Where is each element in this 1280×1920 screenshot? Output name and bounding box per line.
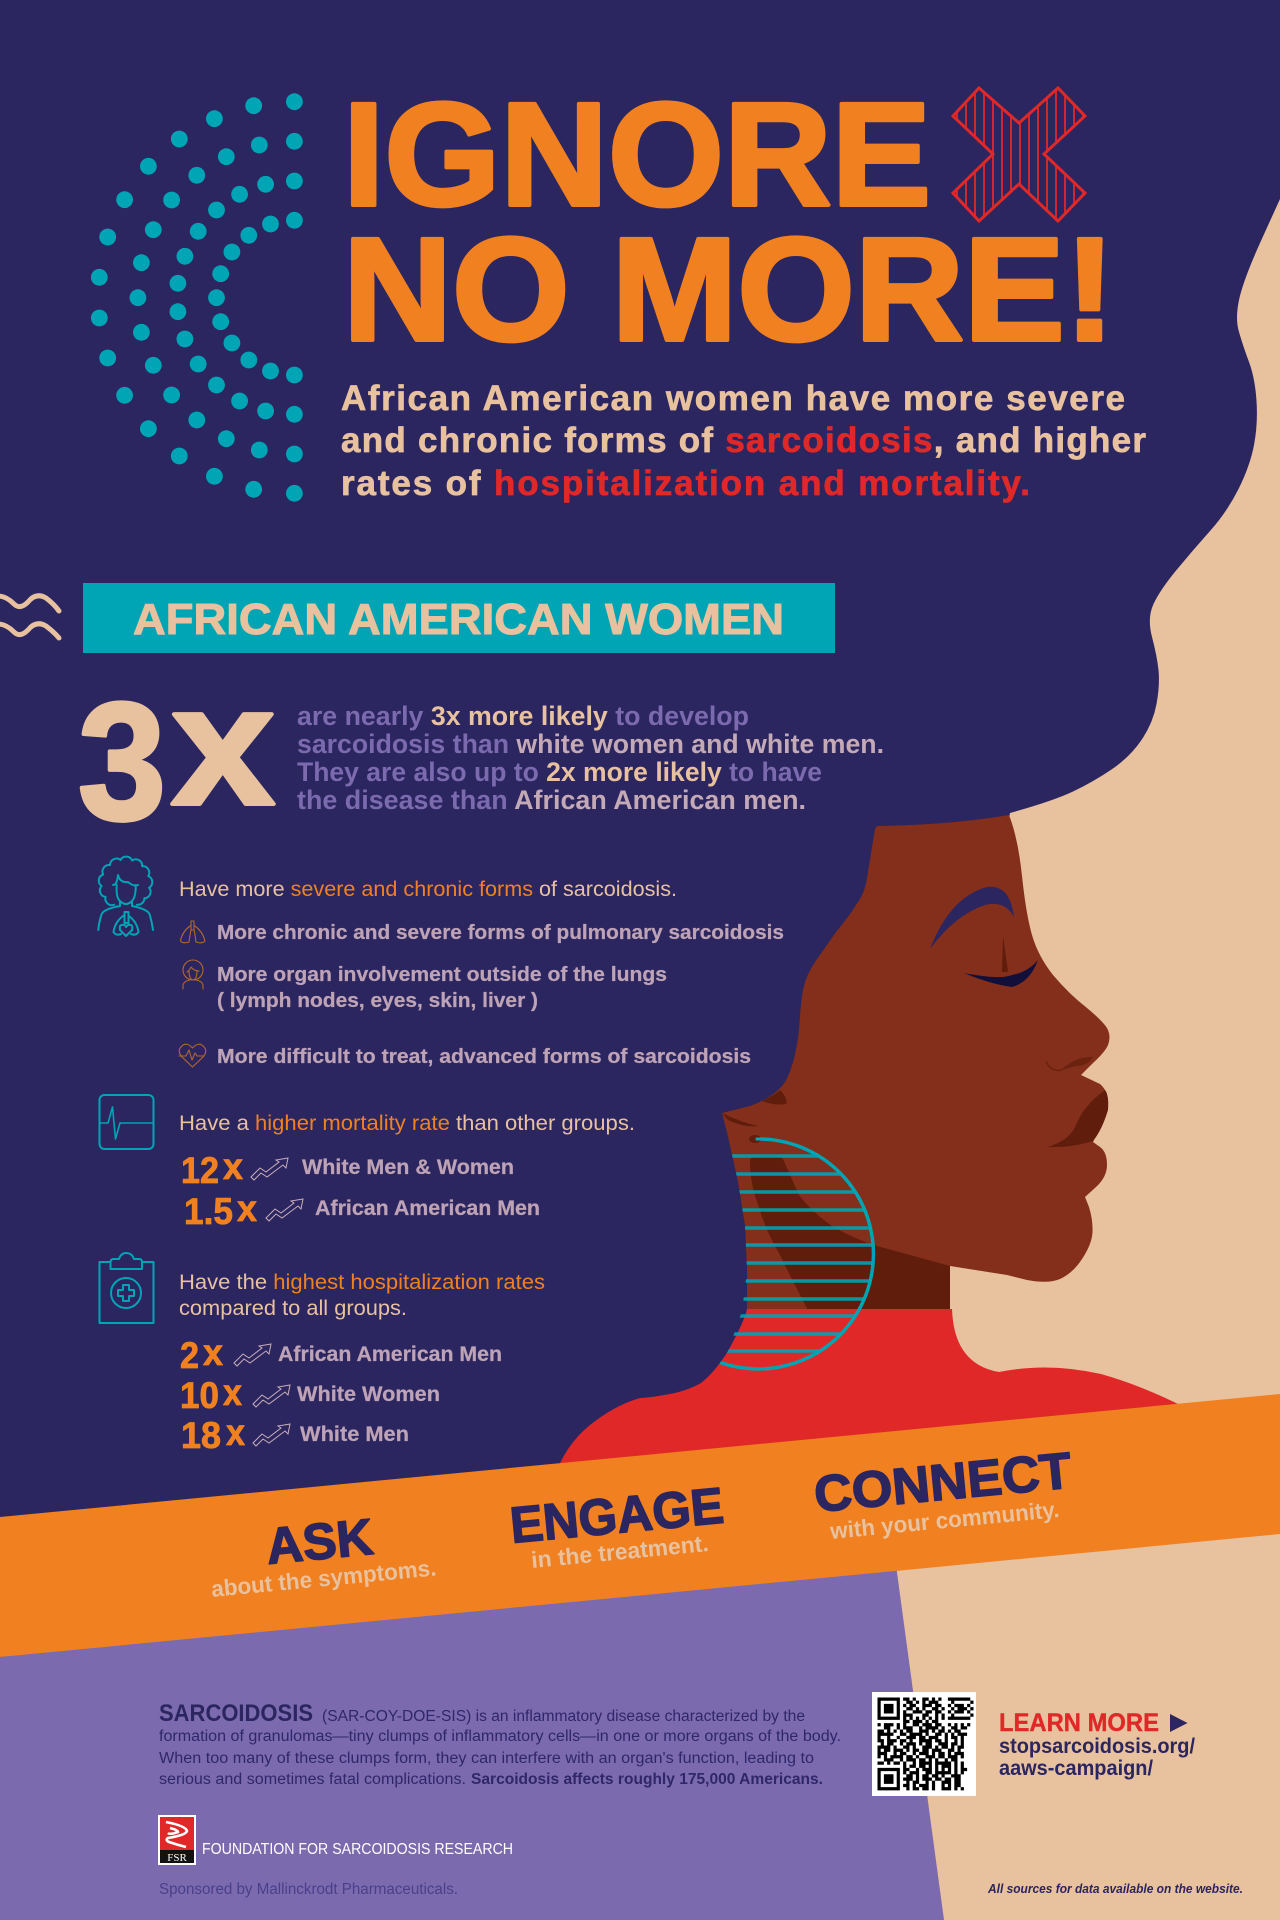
purple footer panel bbox=[0, 1540, 1000, 1920]
stat: 18x white men: x bbox=[226, 1412, 245, 1453]
item: difficult to treat: More difficult to treat, advanced forms of sarcoidosis bbox=[217, 1046, 751, 1068]
subtitle bbox=[341, 379, 1146, 503]
hospitalization heading: Have the highest hospitalization rates bbox=[179, 1271, 545, 1294]
QR code bbox=[872, 1692, 976, 1796]
neck shadow bbox=[750, 1154, 950, 1312]
3x paragraph: the disease than African American men. bbox=[297, 785, 806, 815]
band call to action: ask bbox=[210, 1508, 437, 1602]
stat: 12x white men and women: x bbox=[223, 1146, 243, 1187]
stat: 1.5x african american men: African American Men bbox=[315, 1197, 540, 1220]
stat: 18x white men: White Men bbox=[300, 1423, 409, 1446]
stat: 10x white women: x bbox=[223, 1372, 242, 1413]
3x paragraph: They are also up to 2x more likely to have bbox=[297, 757, 822, 787]
earring bbox=[719, 1135, 876, 1371]
red shirt bbox=[553, 1309, 1180, 1480]
icon: lungs bbox=[180, 921, 205, 943]
subtitle: and chronic forms of sarcoidosis, and higher bbox=[341, 421, 1146, 460]
beige footer panel bbox=[896, 1520, 1280, 1920]
big 3x stat bbox=[78, 651, 275, 855]
stat: 18x white men bbox=[181, 1412, 409, 1456]
definition text block: SARCOIDOSIS bbox=[159, 1700, 313, 1727]
learn more: aaws-campaign/ bbox=[999, 1757, 1153, 1780]
band call to action: engage: ENGAGE bbox=[508, 1477, 726, 1554]
band call to action: engage: in the treatment. bbox=[530, 1530, 710, 1573]
definition text block: (SAR-COY-DOE-SIS) is an inflammatory disease characterized by the bbox=[322, 1708, 805, 1725]
band call to action: ask: about the symptoms. bbox=[210, 1554, 437, 1602]
jaw and ear shadows bbox=[722, 1090, 786, 1126]
learn more bbox=[999, 1709, 1195, 1780]
section banner: AFRICAN AMERICAN WOMEN bbox=[133, 595, 784, 644]
stat: 2x african american men: 2 bbox=[180, 1335, 199, 1376]
sources note: All sources for data available on the website. bbox=[987, 1882, 1243, 1896]
hair covering earring bbox=[600, 1113, 747, 1400]
stat: 10x white women bbox=[180, 1372, 440, 1416]
definition text block: serious and sometimes fatal complications. bbox=[159, 1771, 466, 1788]
big 3x stat: x bbox=[171, 651, 275, 841]
stat: 2x african american men: African American Men bbox=[278, 1343, 502, 1366]
stat: 12x white men and women: 12 bbox=[181, 1150, 219, 1191]
stat: 1.5x african american men: 1.5 bbox=[184, 1191, 233, 1232]
band call to action: ask: ASK bbox=[264, 1508, 376, 1575]
beige background behind profile bbox=[920, 199, 1280, 1480]
icon: head bbox=[183, 960, 203, 989]
stat: 12x white men and women bbox=[181, 1146, 514, 1191]
3x paragraph: sarcoidosis than white women and white men. bbox=[297, 729, 884, 759]
item: pulmonary: More chronic and severe forms of pulmonary sarcoidosis bbox=[217, 922, 784, 944]
definition text block: When too many of these clumps form, they can interfere with an organ's function, leading to bbox=[159, 1750, 814, 1767]
icon: ECG monitor bbox=[100, 1095, 154, 1149]
item: organ involvement bbox=[217, 964, 667, 1012]
stat: 10x white women: White Women bbox=[297, 1383, 440, 1406]
stat: 12x white men and women: White Men & Women bbox=[302, 1156, 514, 1179]
icon: dot semicircle bbox=[91, 93, 303, 502]
orange band bbox=[0, 1394, 1280, 1657]
band call to action: connect: with your community. bbox=[828, 1496, 1060, 1544]
eye lash bbox=[964, 960, 1038, 987]
section banner bbox=[83, 583, 835, 653]
icon: woman with lungs bbox=[98, 857, 153, 936]
title bbox=[343, 73, 1115, 372]
title: NO MORE! bbox=[343, 208, 1115, 372]
icon: heart bbox=[179, 1044, 206, 1067]
learn more: LEARN MORE bbox=[999, 1709, 1159, 1737]
eye crease bbox=[1002, 936, 1008, 972]
stat: 18x white men: 18 bbox=[181, 1415, 221, 1456]
stat: 1.5x african american men bbox=[184, 1188, 540, 1232]
hospitalization heading bbox=[179, 1271, 545, 1320]
band call to action: connect: CONNECT bbox=[812, 1441, 1074, 1523]
lips bbox=[1048, 1090, 1108, 1147]
item: organ involvement: More organ involvement outside of the lungs bbox=[217, 964, 667, 986]
definition text block: formation of granulomas—tiny clumps of inflammatory cells—in one or more organs of the body. bbox=[159, 1728, 841, 1745]
stat: 1.5x african american men: x bbox=[237, 1188, 257, 1229]
big 3x stat: 3 bbox=[78, 669, 166, 855]
title: IGNORE bbox=[343, 73, 931, 237]
face and neck bbox=[722, 815, 1110, 1312]
icon: clipboard bbox=[100, 1253, 154, 1323]
sponsor line: Sponsored by Mallinckrodt Pharmaceuticals. bbox=[159, 1881, 458, 1898]
FSR logo bbox=[158, 1815, 196, 1865]
FSR logo: FSR bbox=[167, 1852, 187, 1864]
stat: 10x white women: 10 bbox=[180, 1375, 219, 1416]
subtitle: African American women have more severe bbox=[341, 379, 1125, 418]
hospitalization heading: compared to all groups. bbox=[179, 1297, 407, 1320]
icon: waves bbox=[0, 596, 59, 638]
stat: 2x african american men bbox=[180, 1332, 502, 1376]
nostril bbox=[1046, 1061, 1062, 1070]
3x paragraph: are nearly 3x more likely to develop bbox=[297, 701, 749, 731]
definition text block bbox=[159, 1700, 841, 1788]
eyebrow bbox=[930, 887, 1014, 949]
first finding text: Have more severe and chronic forms of sarcoidosis. bbox=[179, 878, 677, 901]
definition text block: Sarcoidosis affects roughly 175,000 Americans. bbox=[471, 1771, 823, 1788]
subtitle: rates of hospitalization and mortality. bbox=[341, 464, 1030, 503]
mortality heading: Have a higher mortality rate than other groups. bbox=[179, 1112, 635, 1135]
item: organ involvement: ( lymph nodes, eyes, skin, liver ) bbox=[217, 990, 538, 1012]
illustration: woman in profile bbox=[553, 815, 1180, 1480]
3x paragraph bbox=[297, 701, 884, 815]
icon: red striped X bbox=[953, 80, 1085, 230]
learn more: stopsarcoidosis.org/ bbox=[999, 1735, 1195, 1758]
foundation name: FOUNDATION FOR SARCOIDOSIS RESEARCH bbox=[202, 1841, 513, 1858]
stat: 2x african american men: x bbox=[203, 1332, 223, 1373]
